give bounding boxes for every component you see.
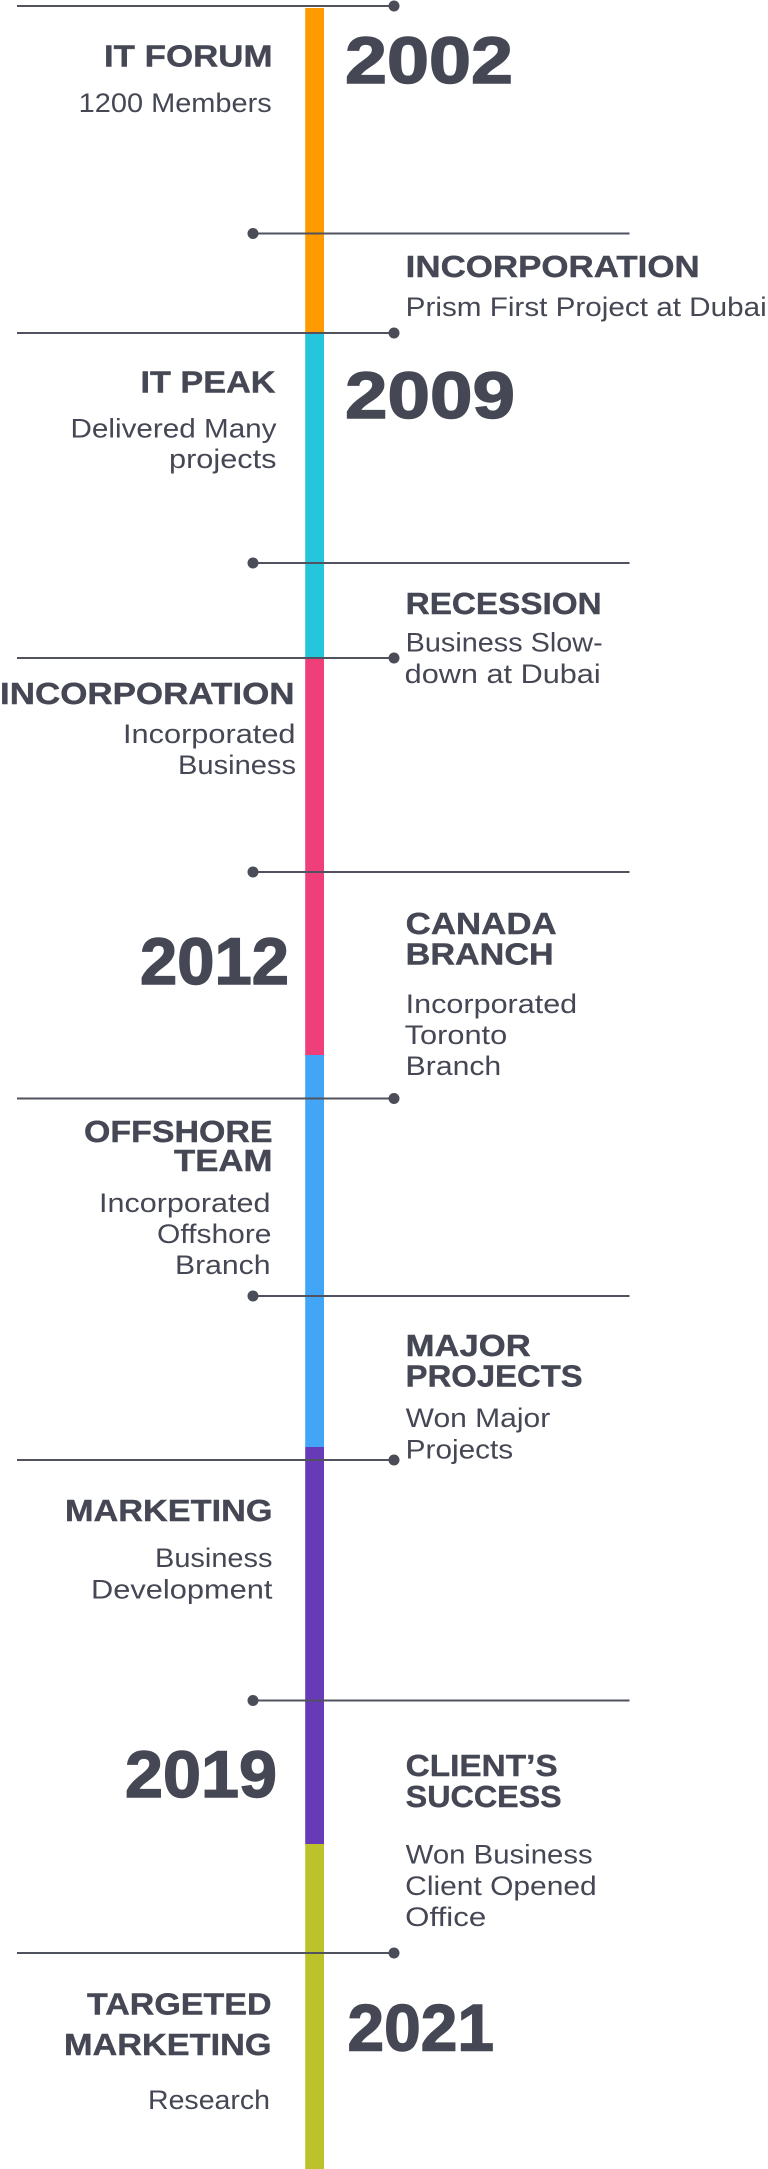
connector: incorporation left [17, 652, 400, 664]
year 2012: 2012 [140, 924, 289, 998]
vertical colored timeline bar [305, 8, 324, 2169]
description: Research [148, 2085, 270, 2115]
entry: Major Projects [406, 1328, 583, 1464]
heading: CLIENT’S [406, 1748, 558, 1783]
entry: Marketing [65, 1493, 273, 1604]
heading [406, 1748, 562, 1814]
heading: OFFSHORE [84, 1114, 272, 1149]
description [406, 1403, 550, 1464]
connector: 2009 [17, 328, 400, 338]
entry: IT Peak [70, 364, 277, 474]
heading: INCORPORATION [0, 676, 294, 711]
entry: Incorporation [406, 249, 767, 322]
description: Prism First Project at Dubai [406, 292, 767, 322]
description: Development [91, 1574, 273, 1604]
year 2021: 2021 [348, 1990, 494, 2064]
heading: SUCCESS [406, 1779, 562, 1814]
entry: Recession [405, 586, 603, 689]
connector: canada branch [248, 866, 630, 878]
entry: Client's Success [405, 1748, 597, 1932]
description [405, 628, 603, 689]
description: Won Major [406, 1403, 550, 1433]
heading: BRANCH [406, 936, 554, 971]
heading [64, 1986, 272, 2062]
connector: incorporation [248, 228, 630, 239]
description: Office [405, 1902, 486, 1932]
heading: PROJECTS [406, 1358, 583, 1393]
description: 1200 Members [79, 88, 272, 118]
description: Incorporated [123, 719, 296, 749]
year 2009: 2009 [345, 358, 515, 432]
heading: TARGETED [87, 1986, 272, 2021]
connector: targeted marketing [17, 1948, 400, 1958]
heading: MAJOR [406, 1328, 531, 1363]
description: Projects [406, 1434, 513, 1464]
entry: Offshore Team [84, 1114, 272, 1280]
entry: Targeted Marketing [64, 1986, 272, 2115]
connector: major projects [248, 1290, 630, 1302]
description: Branch [406, 1051, 501, 1081]
heading: MARKETING [65, 1493, 272, 1528]
description [405, 1840, 597, 1932]
description: Business [178, 750, 296, 780]
description: Business Slow- [406, 628, 603, 658]
description [70, 414, 277, 474]
connector: client's success [248, 1695, 630, 1706]
heading [84, 1114, 272, 1178]
description: Incorporated [406, 989, 577, 1019]
connector: 2002 [17, 0, 400, 12]
description: Branch [175, 1250, 270, 1280]
heading: TEAM [174, 1143, 272, 1178]
connector: marketing [17, 1454, 400, 1466]
description: Delivered Many [70, 414, 277, 444]
heading [406, 1328, 583, 1393]
description: down at Dubai [405, 659, 601, 689]
description [91, 1543, 273, 1604]
heading: INCORPORATION [406, 249, 700, 284]
description: Toronto [405, 1020, 507, 1050]
description: projects [169, 444, 276, 474]
description [123, 719, 296, 780]
year 2002: 2002 [345, 23, 513, 97]
description: Client Opened [405, 1871, 597, 1901]
entry: IT Forum [79, 38, 272, 118]
description: Won Business [406, 1840, 593, 1870]
description: Business [155, 1543, 272, 1573]
description: Incorporated [99, 1188, 270, 1218]
heading: RECESSION [406, 586, 602, 621]
heading: IT FORUM [104, 38, 272, 73]
connector: offshore team [17, 1093, 400, 1104]
connector: recession [248, 558, 630, 568]
description [405, 989, 577, 1081]
description [99, 1188, 272, 1280]
description: Offshore [157, 1219, 272, 1249]
heading: CANADA [406, 906, 557, 941]
heading: IT PEAK [140, 364, 276, 399]
year 2019: 2019 [125, 1737, 277, 1811]
heading: MARKETING [64, 2027, 272, 2062]
entry: Canada Branch [405, 906, 577, 1081]
entry: Incorporation left [0, 676, 296, 780]
heading [406, 906, 557, 971]
